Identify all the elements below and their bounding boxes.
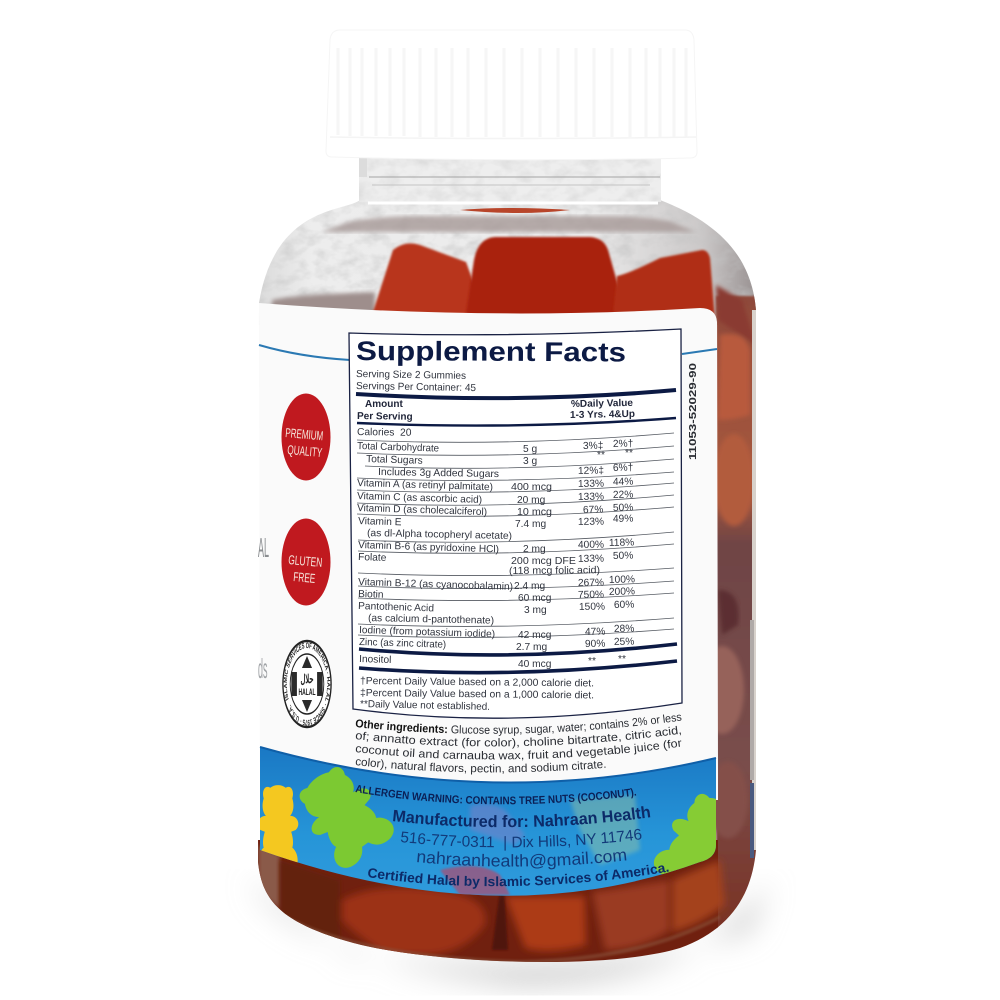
faint bear: purple lower bbox=[440, 866, 510, 895]
row: vitamin e bbox=[358, 513, 633, 542]
row: pantothenic acid: 60% bbox=[614, 599, 634, 611]
badge: halal seal: ISLAMIC SERVICES OF AMERICA · HALAL · SINCE 1975 · U.S.A. bbox=[284, 642, 330, 726]
row: iodine bbox=[359, 623, 634, 641]
row: inositol: ** bbox=[618, 654, 626, 665]
row: zinc: 2.7 mg bbox=[516, 642, 547, 653]
badge: premium quality bbox=[282, 394, 330, 480]
bottle neck bbox=[359, 157, 661, 213]
supplement facts panel bbox=[349, 329, 682, 718]
other ingredients text: color), natural flavors, pectin, and sodium citrate. bbox=[356, 758, 606, 774]
right side contents bbox=[716, 296, 760, 950]
other ingredients text: Other ingredients: Glucose syrup, sugar, water; contains 2% or less bbox=[356, 714, 682, 736]
row: vitamin a: 133% bbox=[578, 479, 604, 490]
row: folate: Folate bbox=[358, 552, 387, 564]
blue rule right bbox=[682, 349, 717, 354]
row: inositol: Inositol bbox=[359, 654, 392, 666]
bear: yellow bbox=[260, 785, 298, 862]
row: added sugars: 12%‡ bbox=[578, 466, 604, 477]
serving info: Serving Size 2 Gummies bbox=[356, 369, 466, 382]
manufacturer block bbox=[368, 806, 669, 889]
row: pantothenic acid bbox=[358, 599, 634, 627]
row: folate: 200 mcg DFE bbox=[511, 556, 576, 567]
column headers: Per Serving bbox=[357, 411, 413, 423]
footnotes: **Daily Value not established. bbox=[360, 699, 490, 713]
row: vitamin e: Vitamin E bbox=[358, 516, 402, 528]
bottle body bbox=[250, 195, 765, 980]
row: folate: 50% bbox=[613, 550, 633, 562]
badge: gluten free: GLUTEN bbox=[288, 552, 323, 570]
faint bear: purple bbox=[470, 804, 525, 845]
row: biotin: 200% bbox=[609, 586, 635, 598]
cap bbox=[326, 30, 697, 160]
serving info bbox=[356, 369, 476, 394]
row: added sugars: 6%† bbox=[613, 462, 633, 474]
footnotes: †Percent Daily Value based on a 2,000 calorie diet. bbox=[360, 676, 594, 689]
row: vitamin d: 67% bbox=[583, 505, 603, 516]
red sliver through neck bbox=[460, 208, 570, 213]
row: vitamin a: Vitamin A (as retinyl palmitate) bbox=[357, 478, 493, 493]
allergen warning: ALLERGEN WARNING: CONTAINS TREE NUTS (COCONUT). bbox=[355, 785, 636, 804]
row: iodine: Iodine (from potassium iodide) bbox=[359, 625, 495, 640]
row: vitamin c bbox=[357, 489, 633, 506]
row: pantothenic acid: Pantothenic Acid bbox=[358, 601, 434, 614]
column headers: %Daily Value bbox=[571, 398, 633, 410]
faint bear: yellow bbox=[570, 795, 640, 865]
row: iodine: 42 mcg bbox=[518, 630, 552, 641]
row: vitamin c: 20 mg bbox=[517, 495, 546, 506]
row: inositol bbox=[359, 654, 626, 670]
row: total carbohydrate: Total Carbohydrate bbox=[357, 441, 440, 455]
row: added sugars bbox=[378, 462, 633, 480]
row: vitamin b-6: 400% bbox=[578, 540, 604, 551]
manufacturer block: nahraanhealth@gmail.com bbox=[417, 851, 626, 870]
badge: halal seal: حلال bbox=[300, 673, 314, 687]
row: vitamin c: 22% bbox=[613, 489, 633, 501]
row: total sugars bbox=[366, 448, 633, 467]
manufacturer block: Certified Halal by Islamic Services of America. bbox=[368, 864, 669, 889]
row: biotin: 60 mcg bbox=[518, 593, 552, 604]
serving info: Servings Per Container: 45 bbox=[356, 381, 476, 394]
row: vitamin b-12 bbox=[358, 574, 635, 593]
row: vitamin e: 123% bbox=[578, 517, 604, 528]
row: vitamin e: 49% bbox=[613, 513, 633, 525]
row: vitamin e: (as dl-Alpha tocopheryl acetate) bbox=[367, 528, 512, 542]
badge: halal seal: HALAL bbox=[298, 686, 316, 697]
row: biotin: Biotin bbox=[358, 589, 384, 601]
gummy: top middle bbox=[466, 235, 618, 314]
row: vitamin b-12: 2.4 mg bbox=[514, 581, 545, 592]
row: zinc: 25% bbox=[614, 636, 634, 648]
bear: green right bbox=[654, 794, 716, 874]
row: vitamin b-12: 267% bbox=[578, 578, 604, 589]
base contents bbox=[258, 840, 718, 962]
row: total sugars: ** bbox=[597, 450, 605, 461]
cut off front text: S bbox=[250, 573, 267, 642]
row: pantothenic acid: 150% bbox=[579, 602, 605, 613]
row: zinc: 90% bbox=[585, 639, 605, 650]
row: vitamin b-6: 118% bbox=[609, 537, 634, 549]
row: iodine: 28% bbox=[614, 623, 634, 635]
row: pantothenic acid: (as calcium d-pantothenate) bbox=[368, 613, 494, 627]
other ingredients text bbox=[356, 714, 682, 774]
lot code: 11053-52029-90 bbox=[687, 363, 699, 460]
row: folate: (118 mcg folic acid) bbox=[509, 565, 600, 577]
row: vitamin b-6: 2 mg bbox=[523, 544, 546, 555]
badge: premium quality: PREMIUM bbox=[285, 425, 324, 443]
gummy: top right bbox=[612, 250, 715, 322]
gummy: bottom left bbox=[342, 888, 486, 955]
row: zinc: Zinc (as zinc citrate) bbox=[359, 637, 446, 651]
row: total sugars: Total Sugars bbox=[366, 454, 423, 467]
row: biotin bbox=[358, 586, 635, 604]
manufacturer block: Manufactured for: Nahraan Health bbox=[393, 806, 650, 828]
row: vitamin d: Vitamin D (as cholecalciferol) bbox=[357, 503, 487, 518]
footnotes bbox=[360, 676, 594, 713]
other ingredients text: coconut oil and carnauba wax, fruit and vegetable juice (for bbox=[356, 740, 682, 760]
badge: gluten free bbox=[282, 518, 330, 606]
row: biotin: 750% bbox=[578, 590, 604, 601]
row: vitamin b-12: Vitamin B-12 (as cyanocobalamin) bbox=[358, 577, 513, 593]
row: vitamin a: 44% bbox=[613, 476, 633, 488]
row: vitamin e: 7.4 mg bbox=[515, 519, 546, 530]
row: pantothenic acid: 3 mg bbox=[524, 605, 547, 616]
row: calories: Calories 20 bbox=[357, 427, 412, 439]
row: inositol: ** bbox=[588, 656, 596, 667]
bear: green left bbox=[300, 767, 394, 868]
row: vitamin b-6 bbox=[358, 537, 634, 555]
white label bbox=[250, 303, 718, 800]
column headers: Amount bbox=[365, 399, 403, 410]
row: vitamin a: 400 mcg bbox=[511, 482, 552, 493]
cap ribs bbox=[338, 48, 686, 137]
row: vitamin c: Vitamin C (as ascorbic acid) bbox=[357, 491, 482, 506]
dark contents at label edge bbox=[270, 290, 378, 310]
gummy: bottom right bbox=[592, 880, 670, 950]
manufacturer block: 516-777-0311 | Dix Hills, NY 11746 bbox=[400, 828, 642, 851]
column headers: 1-3 Yrs. 4&Up bbox=[570, 409, 635, 421]
footnotes: ‡Percent Daily Value based on a 1,000 calorie diet. bbox=[360, 688, 594, 701]
shadow under bottle bbox=[250, 880, 770, 985]
row: vitamin c: 133% bbox=[578, 492, 604, 503]
bottle base rim bbox=[285, 917, 720, 962]
row: iodine: 47% bbox=[585, 627, 605, 638]
cut off front text: ds bbox=[258, 654, 268, 685]
panel border bbox=[349, 329, 682, 718]
row: vitamin b-12: 100% bbox=[609, 574, 635, 586]
row: total sugars: 3 g bbox=[523, 456, 537, 467]
row: total carbohydrate: 3%‡ bbox=[583, 441, 603, 452]
gummy: bottom middle bbox=[505, 896, 586, 951]
blue band bbox=[258, 747, 751, 899]
row: total carbohydrate bbox=[357, 438, 633, 455]
gummy: top left bbox=[372, 242, 472, 313]
heading: Supplement Facts bbox=[356, 336, 626, 367]
row: total carbohydrate: 5 g bbox=[523, 444, 537, 455]
cut off front text bbox=[258, 538, 269, 678]
column headers bbox=[357, 398, 635, 423]
row: total sugars: ** bbox=[625, 448, 633, 459]
row: vitamin d: 50% bbox=[613, 502, 633, 514]
row: zinc bbox=[359, 636, 634, 653]
far-side label sliver bbox=[752, 310, 756, 850]
row lines bbox=[357, 433, 674, 637]
other ingredients text: of; annatto extract (for color), choline bitartrate, citric acid, bbox=[356, 726, 681, 749]
badge: gluten free: FREE bbox=[293, 569, 316, 586]
frosted glass texture bbox=[259, 201, 754, 303]
shoulder shadow band bbox=[322, 216, 695, 232]
row: total carbohydrate: 2%† bbox=[613, 438, 633, 450]
badge: premium quality: QUALITY bbox=[287, 442, 323, 460]
row: folate: 133% bbox=[578, 554, 604, 565]
row: vitamin b-6: Vitamin B-6 (as pyridoxine HCl) bbox=[358, 540, 499, 555]
row: vitamin d bbox=[357, 502, 633, 518]
row: folate bbox=[358, 550, 633, 577]
cut off front text: AL bbox=[258, 533, 269, 564]
row: vitamin d: 10 mcg bbox=[517, 507, 552, 518]
row: inositol: 40 mcg bbox=[518, 659, 552, 670]
row: added sugars: Includes 3g Added Sugars bbox=[378, 467, 499, 480]
row: vitamin a bbox=[357, 476, 633, 493]
blue rule left bbox=[259, 345, 350, 360]
